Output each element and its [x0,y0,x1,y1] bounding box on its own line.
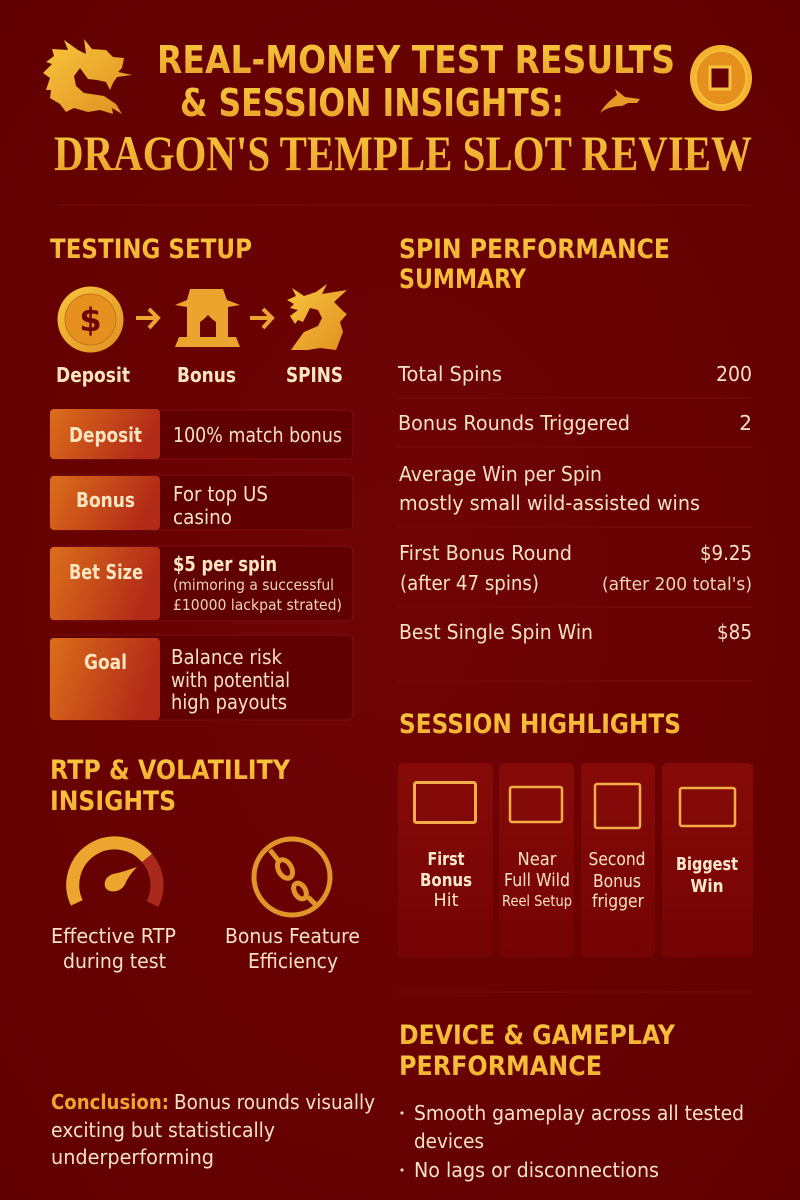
header [43,38,752,181]
arrow [136,309,158,328]
panel: rtp and volatility insights [50,755,360,973]
card: near full wild reel setup: Reel Setup [502,892,572,910]
stat: first bonus round: (after 200 total's) [602,574,752,595]
card: biggest win: Biggest [676,854,738,875]
icon: rtp gauge [73,843,157,904]
row: bet size: Bet Size [69,560,143,584]
stat: first bonus round: (after 47 spins) [400,571,539,595]
heading: session highlights: SESSION HIGHLIGHTS [399,709,681,740]
stat: average win per spin: mostly small wild-assisted wins [399,491,700,515]
stat: first bonus round [399,541,752,595]
icon: dollar coin [58,286,124,352]
heading: performance: PERFORMANCE [399,1051,602,1082]
icon: small gold ornament [600,89,640,113]
label: effective rtp [51,924,176,973]
bullet: smooth gameplay [400,1101,744,1153]
row: bonus: casino [173,505,232,529]
panel: device and gameplay performance [399,1020,744,1182]
conclusion: exciting but statistically [51,1118,275,1142]
row: bonus [50,475,353,530]
title line 2: & SESSION INSIGHTS: [180,81,564,125]
panel: session highlights [398,709,753,957]
card: second bonus trigger [581,763,655,957]
card: first bonus hit: First [428,849,465,870]
heading: spin performance: SPIN PERFORMANCE [399,234,670,265]
bullet: smooth gameplay: devices [414,1129,484,1153]
panel: testing setup [50,234,353,720]
icon: gold coin [690,45,752,111]
row: goal: Goal [84,650,127,674]
stat: first bonus round: $9.25 [700,541,752,565]
heading: summary: SUMMARY [399,264,526,295]
label: effective rtp: during test [63,949,166,973]
row: bonus: Bonus [76,488,135,512]
row: goal: Balance risk [171,645,282,669]
row: deposit: Deposit [69,423,142,447]
stat: total spins [397,362,752,386]
stat: bonus rounds triggered: 2 [739,411,752,435]
card: near full wild reel setup: Full Wild [504,870,570,891]
label: deposit: Deposit [56,363,130,387]
icon: gold dragon [43,39,132,114]
row: deposit [50,409,353,459]
row: bet size: £10000 lackpat strated) [173,596,342,614]
stat: average win per spin: Average Win per Spin [399,462,602,486]
arrow [250,309,272,328]
row: bet size: (mimoring a successful [173,576,334,594]
card: first bonus hit [398,763,493,957]
panel: spin performance summary [397,234,752,644]
card: first bonus hit: Hit [434,890,458,911]
card: near full wild reel setup [499,763,574,957]
row: goal: high payouts [171,690,287,714]
card: first bonus hit: Bonus [420,870,472,891]
card: biggest win: Win [690,876,724,897]
row: bet size [50,546,353,621]
icon: temple [175,289,240,347]
stat: best single spin win: Best Single Spin Win [399,620,593,644]
heading: rtp and volatility: RTP & VOLATILITY [50,755,290,786]
stat: average win per spin [399,462,700,515]
conclusion: Bonus rounds visually [174,1090,375,1114]
stat: best single spin win: $85 [717,620,752,644]
row: deposit: 100% match bonus [173,423,342,447]
card: second bonus trigger: frigger [592,891,645,912]
card: biggest win [662,763,753,957]
heading: device and gameplay: DEVICE & GAMEPLAY [399,1020,675,1051]
stat: total spins: 200 [716,362,752,386]
icon: dollar coin: $ [79,301,102,339]
heading: testing setup: TESTING SETUP [50,234,252,265]
card: second bonus trigger: Second [588,849,646,870]
stat: bonus rounds triggered: Bonus Rounds Triggered [398,411,630,435]
label: bonus: Bonus [177,363,236,387]
heading: insights: INSIGHTS [50,786,176,817]
row: bet size: $5 per spin [173,552,277,576]
row: goal: with potential [171,668,290,692]
card: near full wild reel setup: Near [518,849,557,870]
label: effective rtp: Effective RTP [51,924,176,948]
label: spins: SPINS [286,363,343,387]
conclusion: underperforming [51,1145,214,1169]
bullet: no lags: No lags or disconnections [414,1158,659,1182]
row: goal [50,635,353,720]
label: bonus feature efficiency [225,924,360,973]
icon: bonus feature efficiency [254,839,330,915]
bullet: smooth gameplay: Smooth gameplay across all tested [414,1101,744,1125]
stat: total spins: Total Spins [397,362,502,386]
title line 1: REAL-MONEY TEST RESULTS [157,38,675,82]
stat: first bonus round: First Bonus Round [399,541,572,565]
stat: bonus rounds triggered [398,411,752,435]
card: second bonus trigger: Bonus [593,871,641,892]
row: bonus: For top US [173,482,268,506]
icon: dragon [287,284,347,350]
label: bonus feature efficiency: Efficiency [248,949,338,973]
label: bonus feature efficiency: Bonus Feature [225,924,360,948]
stat: best single spin win [399,620,752,644]
conclusion [51,1090,375,1169]
conclusion: Conclusion: [51,1090,169,1114]
